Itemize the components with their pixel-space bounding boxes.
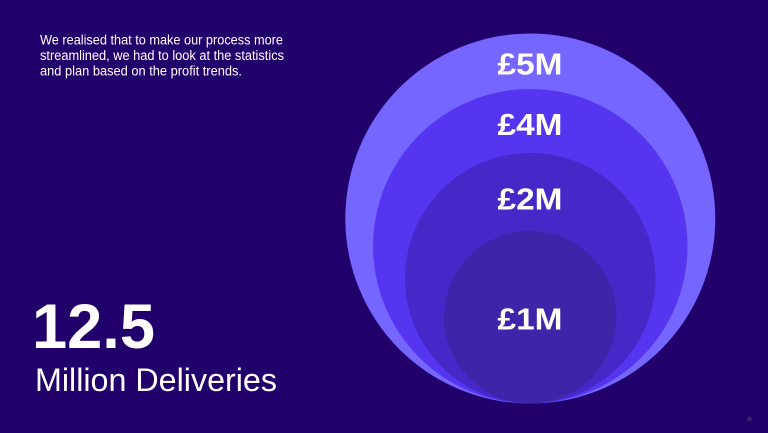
- page marker: [747, 416, 752, 422]
- intro text block: streamlined, we had to look at the statistics: [40, 48, 284, 63]
- headline number: 12.5: [32, 292, 155, 362]
- circle: £1M: [444, 231, 616, 403]
- circle: £2M: [405, 153, 656, 403]
- intro text block: and plan based on the profit trends.: [40, 64, 242, 78]
- label: £1M: £1M: [498, 302, 562, 336]
- label: £4M: £4M: [498, 107, 562, 142]
- circle: £5M: [345, 34, 715, 404]
- nested circle chart: [345, 34, 715, 404]
- label: £5M: £5M: [498, 46, 562, 82]
- intro text block: We realised that to make our process more: [40, 32, 283, 48]
- headline caption: Million Deliveries: [35, 362, 277, 398]
- circle: £4M: [373, 89, 688, 403]
- intro text block: [40, 32, 284, 78]
- label: £2M: £2M: [498, 182, 562, 216]
